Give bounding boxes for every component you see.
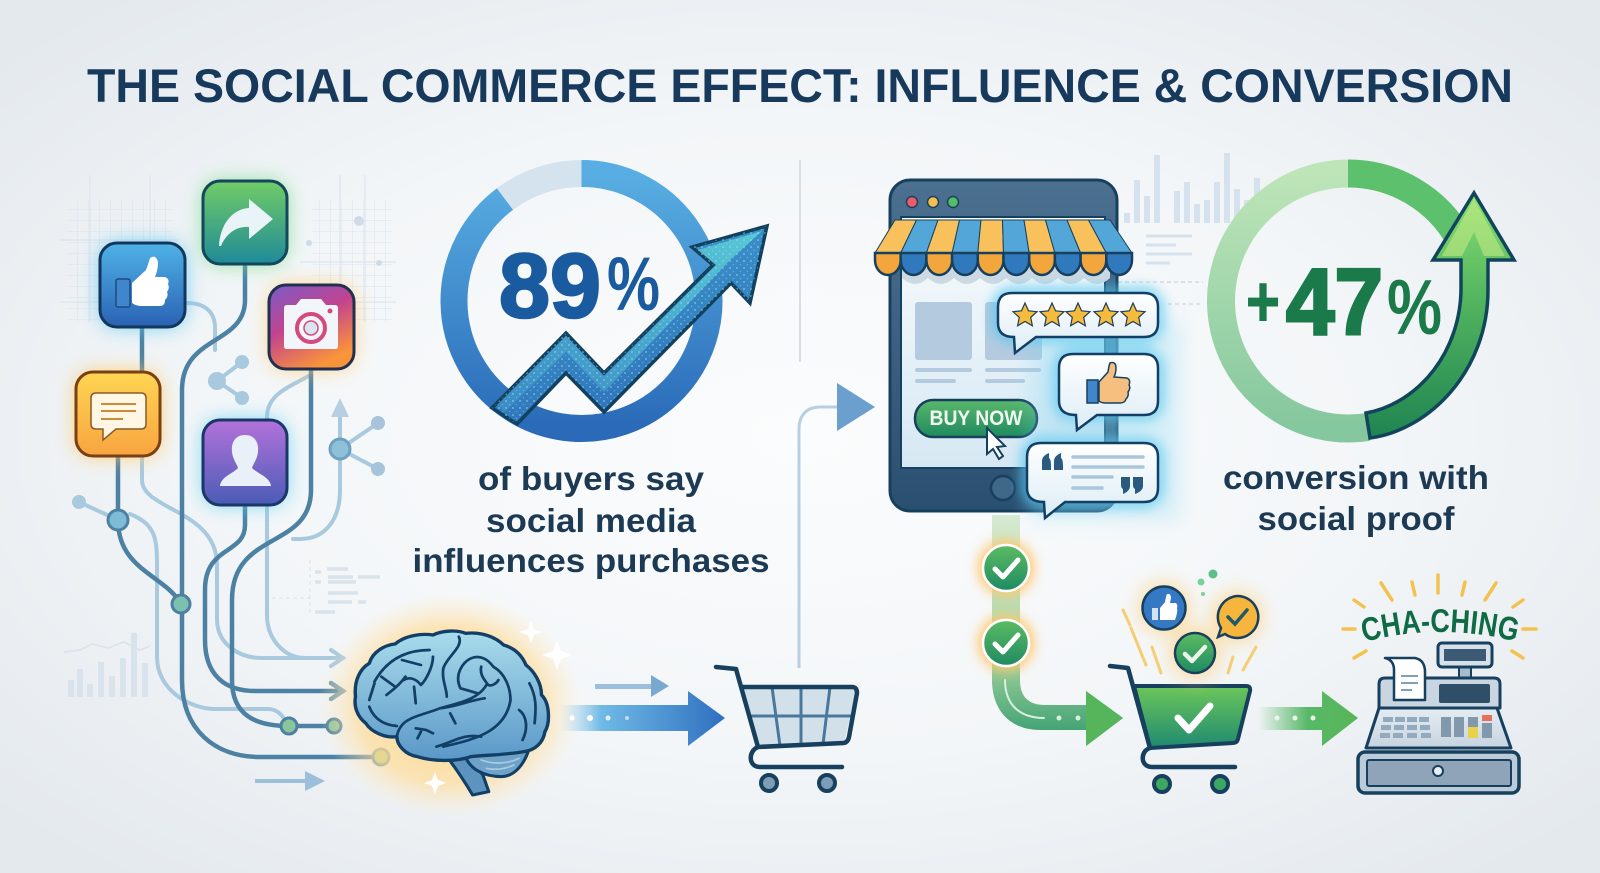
arrow: cart to register — [1258, 691, 1358, 746]
divider — [799, 160, 801, 362]
caption: 89% — [412, 460, 770, 579]
badge: check — [1175, 633, 1215, 673]
check badge 2 — [978, 615, 1034, 671]
awning — [875, 220, 1132, 284]
speed streaks — [1123, 610, 1256, 673]
buy now button: BUY NOW — [930, 407, 1023, 430]
social proof bubbles — [998, 293, 1180, 520]
window dots — [906, 196, 958, 208]
bubble: star rating — [998, 293, 1158, 353]
stat: 89% donut with rising arrow — [454, 174, 767, 428]
arrow: cart to store — [799, 383, 875, 668]
sound text: CHA-CHING — [1362, 609, 1518, 640]
badge: thumbs up — [1142, 586, 1186, 630]
icon: cursor — [987, 428, 1005, 459]
brain stem — [447, 757, 489, 795]
body — [1366, 708, 1511, 748]
cerebellum — [464, 750, 529, 777]
floating dots — [1208, 570, 1218, 578]
caption: 89%: social media — [486, 502, 697, 539]
value: % — [1387, 263, 1442, 351]
check badge 1 — [978, 540, 1034, 596]
home button — [991, 476, 1015, 500]
icon: curved up arrow — [1366, 193, 1514, 438]
dark connector paths — [118, 263, 373, 757]
light connector paths — [79, 303, 378, 726]
small arrow bottom left — [255, 771, 325, 791]
icon: share — [203, 181, 287, 264]
value: + — [1246, 262, 1280, 342]
background data texture: left — [60, 175, 396, 697]
drawer — [1358, 752, 1519, 793]
brain with glow — [318, 593, 582, 817]
value: 47 — [1286, 249, 1383, 354]
caption: +47%: social proof — [1258, 500, 1456, 537]
bubble glow — [998, 293, 1158, 502]
title: THE SOCIAL COMMERCE EFFECT: INFLUENCE & CONVERSION — [87, 59, 1513, 112]
badge: chat check — [1218, 596, 1258, 638]
cash register — [1358, 643, 1519, 793]
bubble: thumbs up — [1059, 354, 1158, 430]
customer display — [1459, 666, 1471, 680]
arrow: brain to cart — [560, 675, 725, 746]
badge glow — [1140, 584, 1261, 677]
icon: profile — [203, 420, 287, 505]
stat: +47% donut with upward arrow — [1221, 174, 1514, 438]
icon: camera — [269, 285, 354, 369]
green cart with badges — [1110, 570, 1261, 792]
caption: 89%: of buyers say — [478, 460, 705, 497]
network nodes — [72, 355, 389, 765]
background data texture: right — [1118, 153, 1257, 304]
shopping cart — [716, 667, 857, 791]
icon: rising arrow — [492, 226, 767, 424]
value: 89 — [499, 236, 601, 337]
caption: +47%: conversion with — [1223, 459, 1489, 496]
keypad — [1380, 715, 1492, 738]
storefront tablet — [875, 180, 1132, 511]
caption: +47% — [1223, 459, 1489, 537]
cha-ching burst — [1341, 573, 1538, 660]
cerebrum — [355, 631, 548, 760]
buy now button — [915, 400, 1037, 437]
value: % — [607, 242, 660, 327]
icon: comment — [76, 372, 160, 456]
bubble: testimonial quote — [1027, 443, 1158, 518]
basket — [1110, 666, 1250, 792]
rays — [1343, 575, 1536, 658]
caption: 89%: influences purchases — [412, 542, 770, 579]
arrow details: green elbow — [1005, 680, 1123, 746]
green path strip under tablet — [992, 515, 1123, 746]
product placeholders — [915, 302, 1042, 383]
receipt — [1385, 658, 1425, 700]
connection network — [79, 263, 378, 757]
icon: like — [100, 243, 185, 327]
folds — [369, 637, 536, 747]
